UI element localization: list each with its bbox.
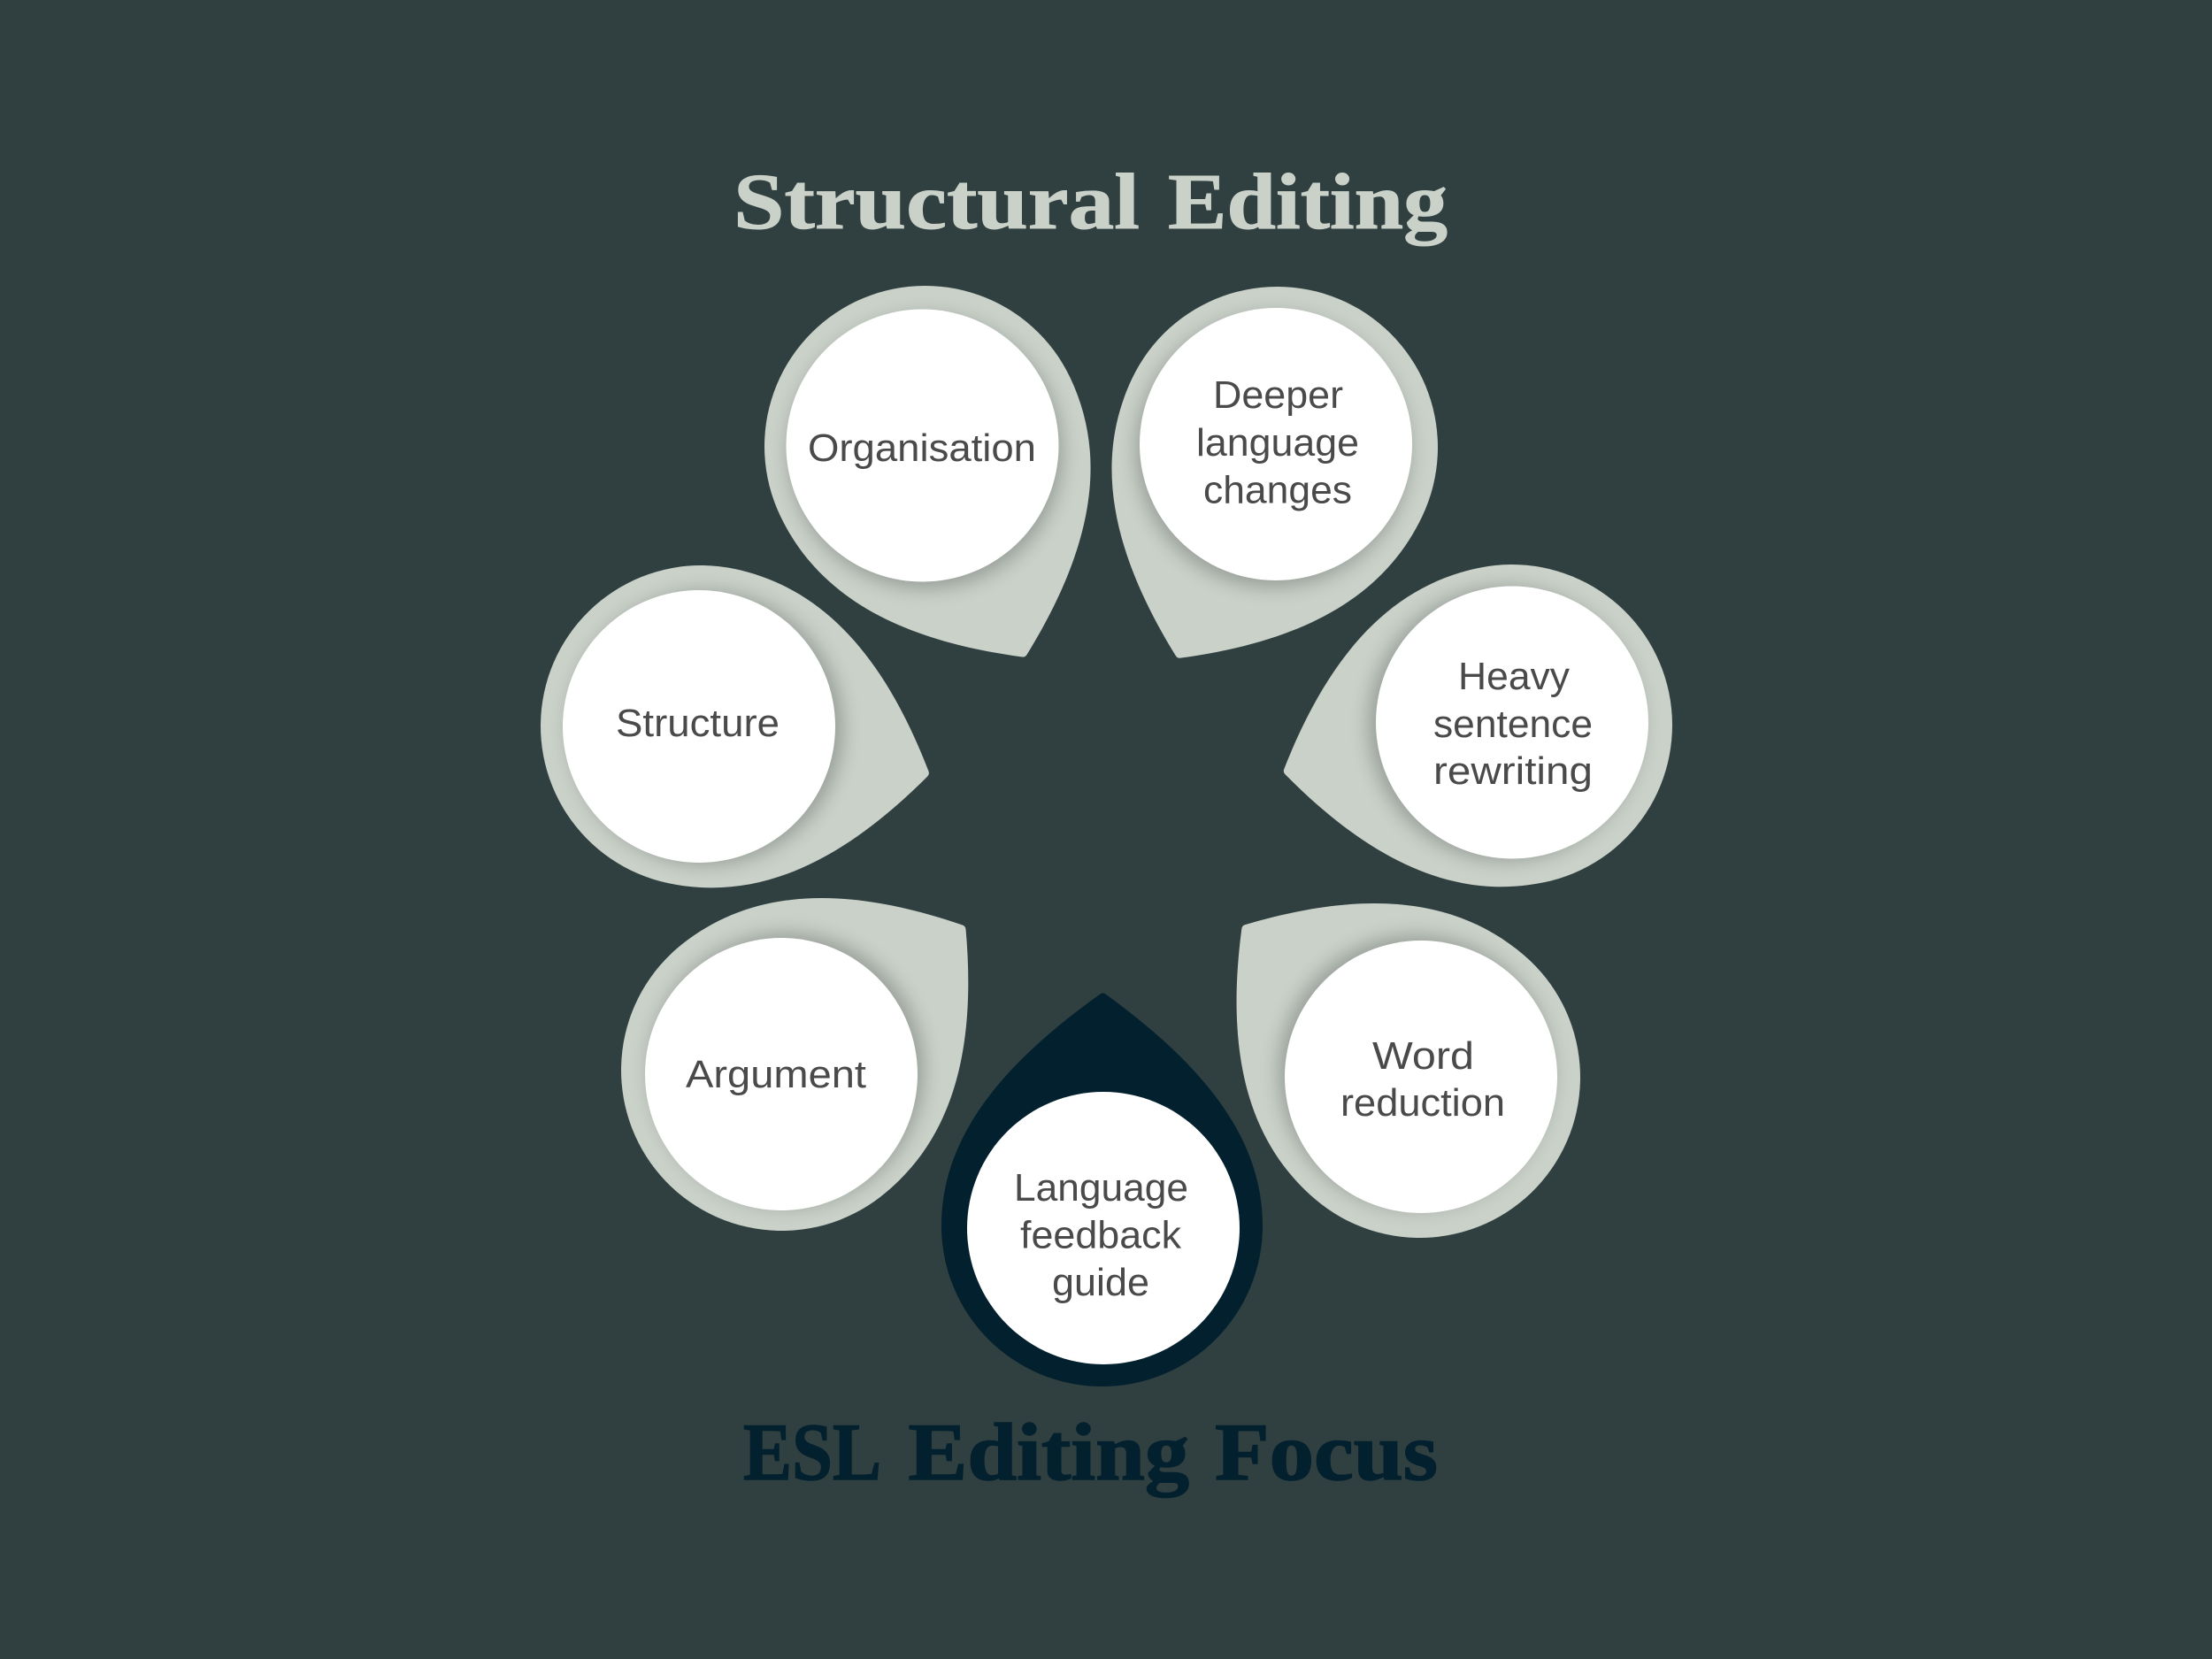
label: Structure: Structure — [616, 702, 780, 745]
label: Deeper language changes: changes — [1203, 469, 1352, 511]
label: Argument: Argument — [686, 1053, 866, 1096]
drop shape: Organisation — [711, 233, 1170, 726]
white circle: Language feedback guide — [967, 1092, 1240, 1364]
label: Word reduction — [1340, 1034, 1505, 1125]
label: Language feedback guide: feedback — [1020, 1214, 1182, 1256]
label: Language feedback guide: guide — [1052, 1261, 1149, 1304]
heading: ESL Editing Focus: ESL — [743, 1407, 881, 1497]
drop shape: Word reduction — [1139, 804, 1646, 1303]
heading: ESL Editing Focus: Editing — [908, 1407, 1189, 1497]
segment: Structure — [511, 535, 962, 931]
label: Language feedback guide: Language — [1014, 1166, 1188, 1210]
label: Word reduction: Word — [1372, 1034, 1474, 1078]
label: Heavy sentence rewriting: rewriting — [1433, 749, 1593, 793]
segment: Organisation — [711, 233, 1170, 726]
segment: Word reduction — [1139, 804, 1646, 1303]
white circle: Argument — [645, 938, 918, 1210]
label: Language feedback guide — [1014, 1166, 1188, 1304]
title: Structural Editing: Editing — [1168, 158, 1448, 246]
circle shadow: Argument — [595, 879, 979, 1261]
circle shadow: Heavy sentence rewriting — [1344, 563, 1666, 885]
label: Deeper language changes — [1196, 373, 1359, 511]
circle shadow: Organisation — [744, 271, 1107, 634]
title: Structural Editing — [733, 158, 1448, 246]
circle shadow: Structure — [544, 566, 867, 889]
drop shape: Language feedback guide — [941, 993, 1263, 1387]
drop shape: Deeper language changes — [1033, 234, 1491, 726]
white circle: Heavy sentence rewriting — [1376, 586, 1648, 858]
label: Deeper language changes: language — [1196, 421, 1359, 465]
segment: Argument — [557, 800, 1064, 1295]
white circle: Word reduction — [1285, 941, 1557, 1213]
label: Word reduction: reduction — [1340, 1081, 1505, 1125]
label: Organisation: Organisation — [808, 426, 1036, 470]
segment: Heavy sentence rewriting — [1251, 535, 1701, 929]
white circle: Deeper language changes — [1140, 308, 1412, 580]
segment: Deeper language changes — [1033, 234, 1491, 726]
circle shadow: Word reduction — [1224, 880, 1608, 1264]
heading: ESL Editing Focus: Focus — [1215, 1407, 1438, 1497]
white circle: Structure — [563, 590, 835, 863]
drop shape: Structure — [511, 535, 962, 931]
label: Heavy sentence rewriting — [1433, 655, 1593, 793]
label: Heavy sentence rewriting: sentence — [1433, 703, 1593, 746]
title: Structural Editing: Structural — [733, 158, 1140, 246]
circle shadow: Deeper language changes — [1092, 269, 1455, 632]
label: Heavy sentence rewriting: Heavy — [1458, 655, 1570, 698]
segment: Language feedback guide (highlighted) — [941, 993, 1263, 1387]
white circle: Organisation — [786, 310, 1058, 582]
heading: ESL Editing Focus — [743, 1407, 1438, 1497]
drop shape: Heavy sentence rewriting — [1251, 535, 1701, 929]
label: Deeper language changes: Deeper — [1213, 373, 1343, 417]
drop shape: Argument — [557, 800, 1064, 1295]
